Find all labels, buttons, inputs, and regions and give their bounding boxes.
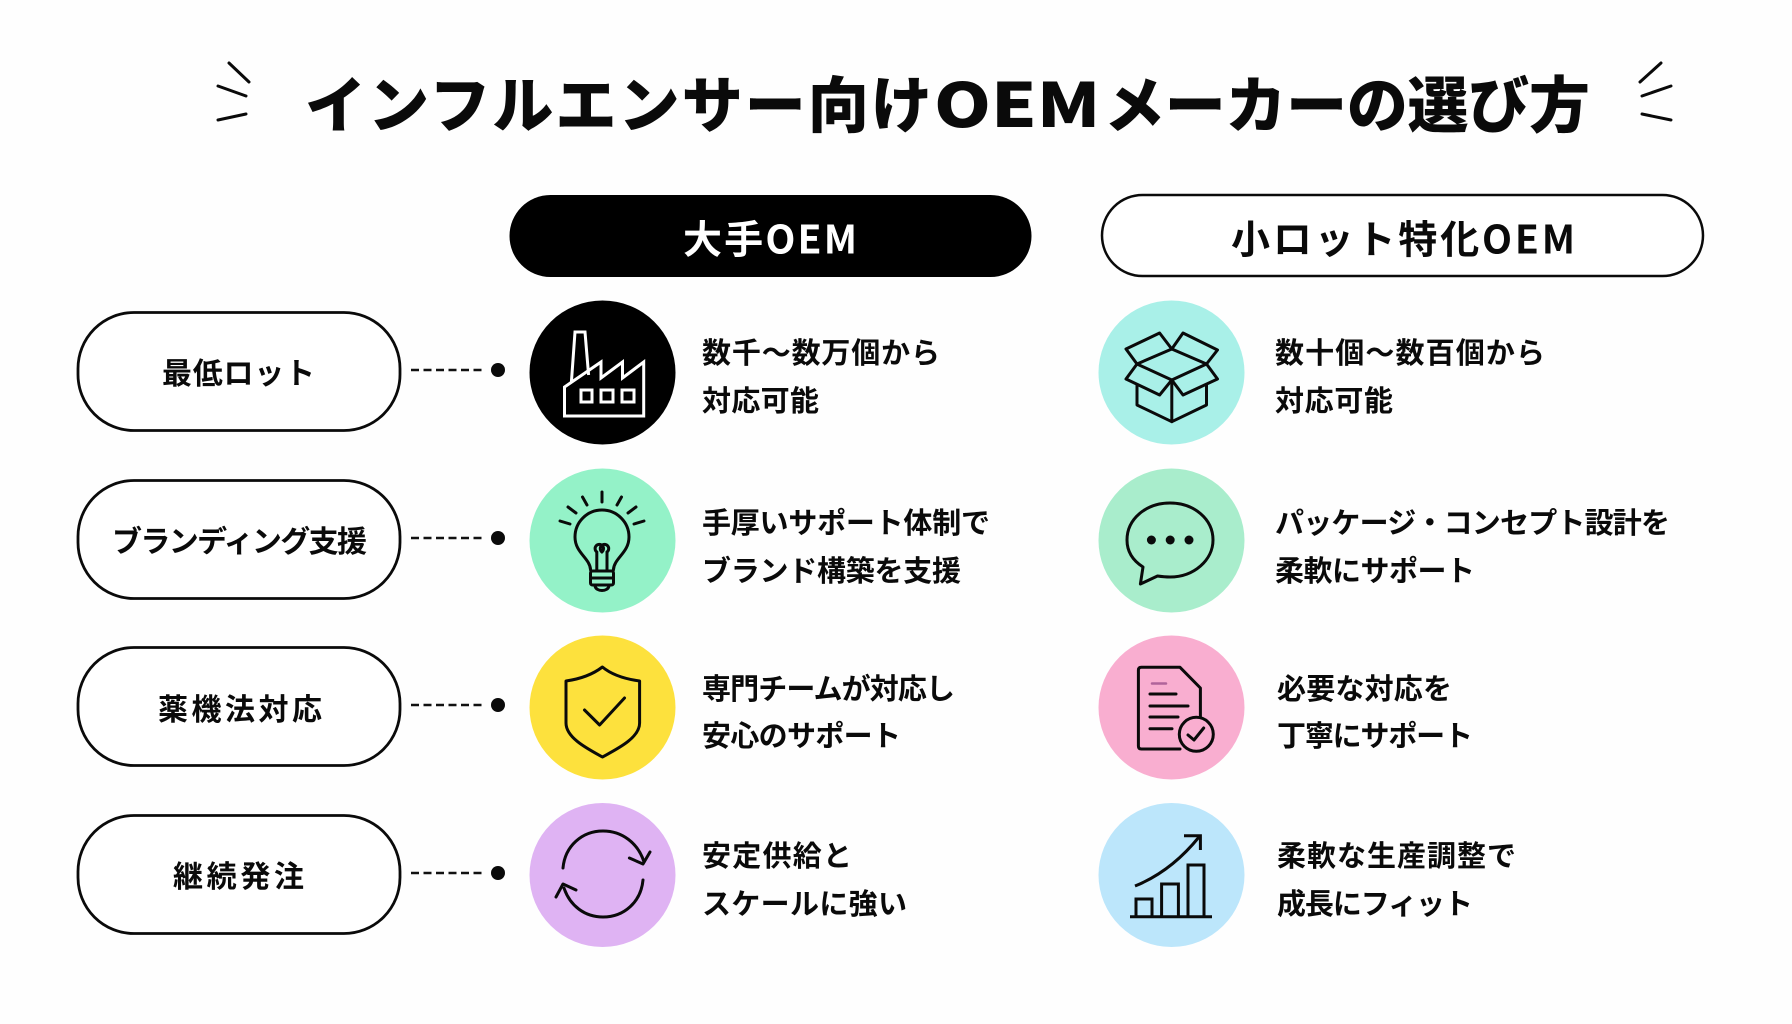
column header: 小ロット特化OEM: 小ロット特化OEM (1231, 210, 1575, 266)
text: 小ロット 薬機法対応: 必要な対応を (1277, 673, 1452, 706)
connector: 最低ロット (411, 363, 505, 377)
icon: speech bubble (1098, 468, 1244, 612)
text: 大手 ブランディング支援: ブランド構築を支援 (702, 554, 961, 588)
text: 小ロット 薬機法対応: 丁寧にサポート (1277, 720, 1473, 753)
text: 大手 薬機法対応: 専門チームが対応し (702, 672, 955, 706)
text: 小ロット ブランディング支援: パッケージ・コンセプト設計を (1275, 507, 1670, 540)
text: 小ロット 最低ロット: 対応可能 (1275, 385, 1393, 418)
row label: 最低ロット (78, 312, 400, 430)
text: 大手 最低ロット: 数千〜数万個から (702, 337, 940, 370)
icon: left burst lines (218, 63, 249, 120)
title: インフルエンサー向け (305, 56, 932, 145)
text: 大手 薬機法対応 (702, 672, 955, 753)
text: 小ロット ブランディング支援: 柔軟にサポート (1275, 555, 1475, 588)
row label: ブランディング支援: ブランディング支援 (112, 525, 367, 559)
text: 大手 継続発注: 安定供給と (702, 840, 852, 873)
row label: 継続発注: 継続発注 (173, 861, 304, 894)
title: メーカーの選び方 (1104, 56, 1590, 145)
text: 大手 最低ロット: 対応可能 (702, 385, 819, 418)
connector: ブランディング支援 (411, 531, 505, 545)
row label: ブランディング支援 (78, 480, 400, 598)
icon: right burst lines (1640, 63, 1671, 120)
title: OEM (934, 57, 1100, 145)
icon: shield (530, 636, 676, 780)
text: 大手 ブランディング支援 (702, 507, 990, 588)
connector: 薬機法対応 (411, 698, 505, 712)
text: 大手 最低ロット (702, 337, 940, 418)
row label: 薬機法対応 (78, 648, 400, 766)
icon: sync arrows (530, 803, 676, 947)
row label: 継続発注 (78, 816, 400, 934)
text: 大手 継続発注: スケールに強い (702, 888, 907, 921)
text: 小ロット ブランディング支援 (1275, 507, 1670, 588)
icon: document with check (1098, 636, 1244, 780)
icon: factory (530, 300, 676, 444)
text: 小ロット 継続発注: 成長にフィット (1277, 888, 1473, 921)
text: 小ロット 継続発注: 柔軟な生産調整で (1277, 840, 1516, 873)
text: 大手 ブランディング支援: 手厚いサポート体制で (702, 507, 990, 540)
column header: 小ロット特化OEM (1102, 195, 1703, 276)
text: 小ロット 継続発注 (1277, 840, 1516, 921)
row label: 薬機法対応: 薬機法対応 (158, 694, 322, 727)
icon: growth bar chart (1098, 803, 1244, 947)
text: 小ロット 最低ロット: 数十個〜数百個から (1275, 337, 1545, 370)
icon: light bulb (530, 468, 676, 612)
text: 大手 薬機法対応: 安心のサポート (702, 720, 901, 753)
row label: 最低ロット: 最低ロット (162, 358, 315, 391)
column header: 大手OEM: 大手OEM (683, 210, 857, 266)
column header: 大手OEM (510, 195, 1032, 277)
title (305, 56, 1590, 145)
text: 大手 継続発注 (702, 840, 907, 921)
connector: 継続発注 (411, 866, 505, 880)
text: 小ロット 最低ロット (1275, 337, 1545, 418)
icon: open box (1098, 300, 1244, 444)
text: 小ロット 薬機法対応 (1277, 673, 1473, 753)
